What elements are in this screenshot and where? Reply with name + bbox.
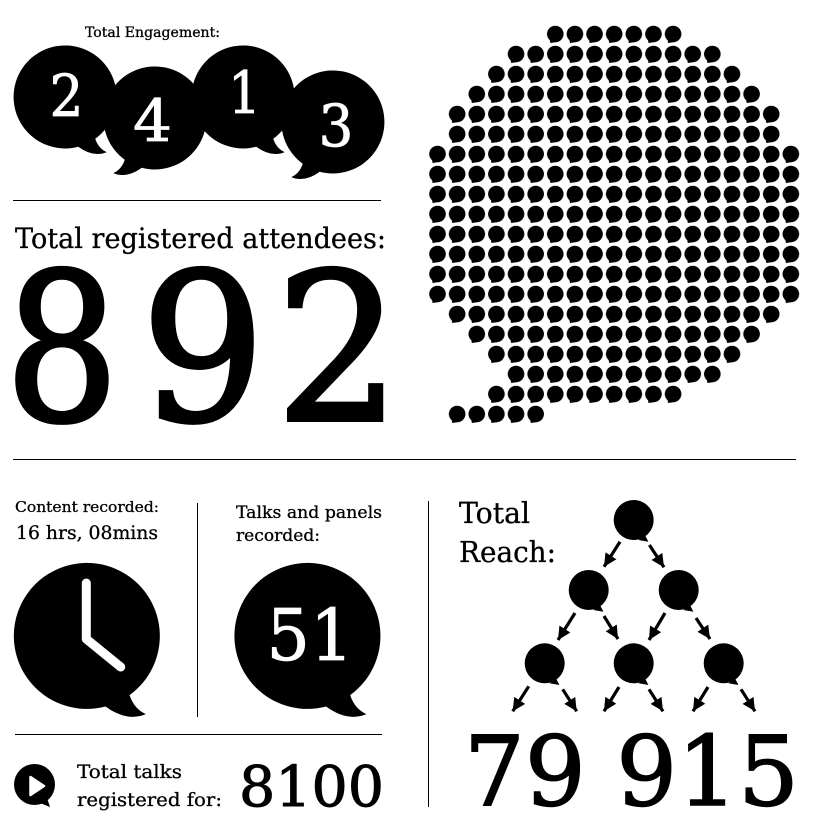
diagram: reach tree nodes (525, 500, 744, 685)
icon: play speech bubble (14, 764, 55, 807)
bubble: 1 (192, 45, 295, 154)
panel: total talks registered (14, 755, 384, 820)
heading: total reach: Reach: (459, 535, 556, 569)
icon: clock speech bubble (14, 563, 160, 717)
number: 79 915: 79 915 (464, 716, 799, 827)
label: total talks registered for: Total talks (77, 761, 182, 783)
heading: total reach: Total (459, 496, 530, 530)
bubble: 4 (103, 66, 206, 175)
bubble: 2: 2 (50, 62, 84, 130)
panel: total engagement (14, 25, 384, 179)
panel: total reach (459, 496, 799, 827)
number: 892 (5, 231, 401, 469)
number: 8100: 8100 (239, 755, 384, 820)
label: talks and panels recorded: Talks and panels (236, 503, 382, 523)
bubble: 1: 1 (228, 59, 261, 127)
bubble: 4: 4 (133, 87, 172, 155)
label: talks and panels recorded: recorded: (236, 526, 320, 546)
bubble: 51 (234, 563, 380, 717)
bubble: 3: 3 (318, 92, 354, 160)
number: 892: 2 (276, 231, 401, 469)
chart: speech bubble made of attendee dots (428, 24, 801, 424)
bubble: 3 (281, 70, 384, 179)
value: duration: 16 hrs, 08mins (16, 523, 158, 544)
number: 892: 9 (141, 231, 265, 469)
arrows: reach tree (513, 542, 755, 711)
heading: total engagement: Total Engagement: (85, 25, 220, 41)
panel: content recorded (14, 498, 160, 717)
panel: talks and panels recorded (234, 503, 382, 717)
label: total talks registered for: registered for: (77, 789, 222, 811)
label: content recorded: Content recorded: (15, 498, 159, 516)
bubble: 2 (14, 45, 117, 154)
number: 892: 8 (5, 231, 119, 469)
heading: total registered attendees: Total registered attendees: (15, 222, 386, 255)
bubble: 51: 51 (266, 594, 354, 677)
